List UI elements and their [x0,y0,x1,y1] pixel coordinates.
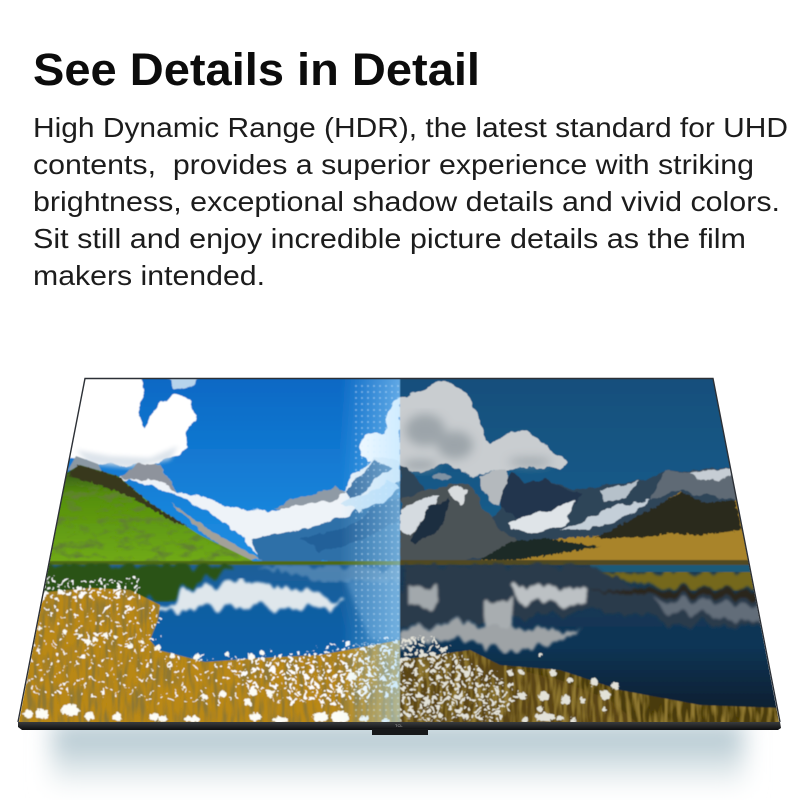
body text: brightness, exceptional shadow details and vivid colors. [33,186,780,217]
mountain reflections [400,566,770,650]
vivid clouds [68,375,400,466]
muted snow mountains [399,465,736,561]
tv screen [0,375,800,730]
brand label: TCL [395,723,403,728]
body text: contents, provides a superior experience with striking [33,149,754,180]
body text: Sit still and enjoy incredible picture details as the film [33,223,746,254]
tv stand badge [372,723,428,735]
muted cotton flower field [392,634,520,722]
vivid sky [67,379,401,562]
cotton flowers vivid [23,626,398,723]
vivid snow mountains [118,456,400,562]
muted shoreline [400,560,770,565]
green reflection [30,565,235,600]
cotton flower fields [20,580,410,706]
tv floor shadow [52,724,744,790]
transition glow [340,375,400,725]
right half: standard dynamic range scene [392,375,800,730]
halftone dots [355,385,400,720]
body text: High Dynamic Range (HDR), the latest standard for UHD [33,112,788,143]
muted cotton flowers [507,653,619,723]
vivid green hill [40,465,255,562]
muted cloud shading [402,414,552,470]
title: See Details in Detail [33,44,480,95]
tv bottom bezel [18,722,781,730]
vivid cloud shading [76,446,178,468]
body text: makers intended. [33,260,265,291]
muted clouds [395,380,566,505]
vivid lake [50,564,401,663]
vivid peak: left rock [68,456,102,472]
tv frame: top and side edges [18,378,780,722]
body text [33,112,788,291]
left half: HDR vivid scene [0,375,410,730]
vivid shoreline [40,561,400,565]
muted lake [399,564,776,709]
gold meadow [10,588,400,730]
golden hillside [480,490,748,561]
golden reflection [590,571,765,590]
snow reflection [160,580,345,614]
dark grass at foreground [501,664,779,722]
muted sky [399,379,730,560]
